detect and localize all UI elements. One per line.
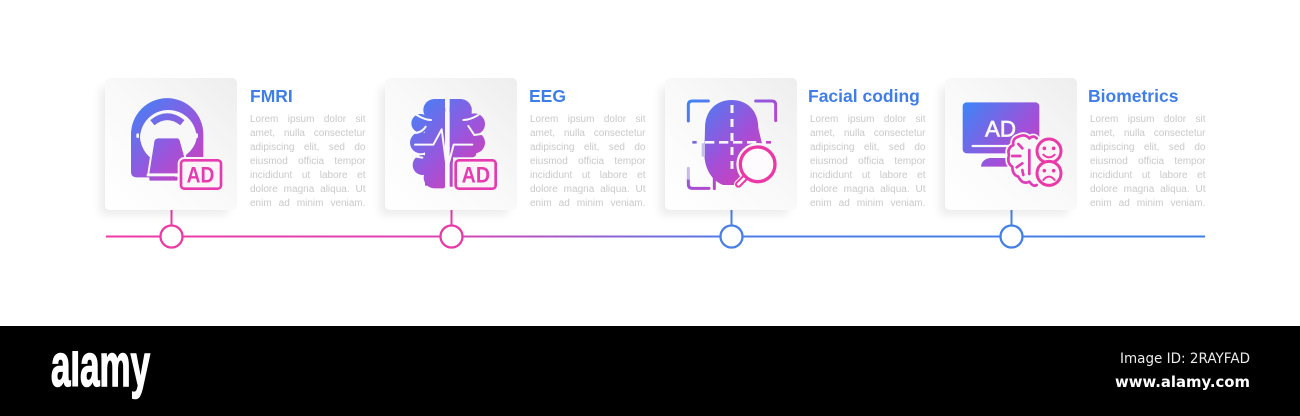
description: amet, nulla consectetur [530,128,646,139]
description: Lorem ipsum dolor sit [530,114,646,125]
image id: Image ID: 2RAYFAD [1120,351,1250,367]
description: eiusmod officia tempor [530,156,646,167]
panel: EEG [380,78,646,216]
description: incididunt ut labore et [530,170,646,181]
card with monitor and emotions icon: AD [985,116,1016,141]
description: Lorem ipsum dolor sit [1090,114,1206,125]
heading: FMRI [250,86,293,106]
description: incididunt ut labore et [1090,170,1206,181]
watermark band [0,326,1300,416]
description [1090,114,1206,209]
description: amet, nulla consectetur [250,128,366,139]
panel: Biometrics [940,78,1206,216]
timeline [106,210,1205,249]
description: amet, nulla consectetur [810,128,926,139]
heading: EEG [529,86,566,106]
description: Lorem ipsum dolor sit [250,114,366,125]
description [810,114,926,209]
description: dolore magna aliqua. Ut [530,184,646,195]
logo: alamy [51,332,150,399]
panel: Facial coding [660,78,926,216]
description: adipiscing elit, sed do [530,142,646,153]
description: enim ad minim veniam. [530,198,646,209]
card with brain icon [385,78,517,210]
description [250,114,366,209]
description: incididunt ut labore et [810,170,926,181]
description: adipiscing elit, sed do [810,142,926,153]
description: eiusmod officia tempor [250,156,366,167]
heading: Facial coding [808,86,920,106]
panel: FMRI [100,78,366,216]
description: adipiscing elit, sed do [250,142,366,153]
description: eiusmod officia tempor [1090,156,1206,167]
heading: Biometrics [1088,86,1178,106]
description: enim ad minim veniam. [1090,198,1206,209]
description: adipiscing elit, sed do [1090,142,1206,153]
card with brain icon: AD [462,163,490,188]
description: dolore magna aliqua. Ut [810,184,926,195]
description: Lorem ipsum dolor sit [810,114,926,125]
description: incididunt ut labore et [250,170,366,181]
description: enim ad minim veniam. [250,198,366,209]
description: enim ad minim veniam. [810,198,926,209]
description: eiusmod officia tempor [810,156,926,167]
description: dolore magna aliqua. Ut [250,184,366,195]
card with monitor and emotions icon [945,78,1077,210]
description: dolore magna aliqua. Ut [1090,184,1206,195]
card with face scan icon [665,78,797,210]
card with MRI icon [105,78,237,210]
description: amet, nulla consectetur [1090,128,1206,139]
description [530,114,646,209]
card with MRI icon: AD [187,163,214,188]
website: www.alamy.com [1115,373,1250,391]
